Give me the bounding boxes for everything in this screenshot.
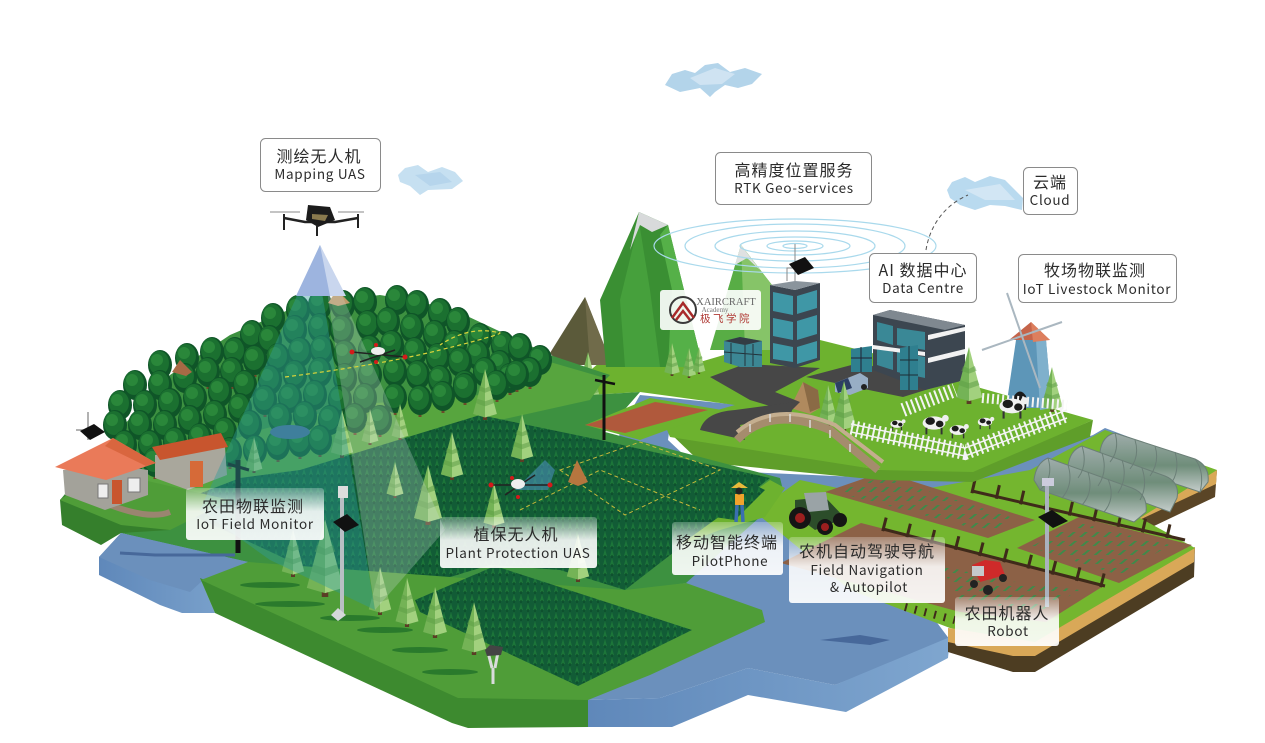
soil sensor — [485, 645, 503, 684]
power pole: back — [595, 375, 615, 440]
label: plant protection UAS: 植保无人机 — [473, 521, 559, 545]
label: IoT field monitor: 农田物联监测 — [202, 493, 304, 517]
right crop field — [1017, 517, 1192, 583]
pickup truck — [835, 373, 868, 396]
RTK signal rings — [654, 219, 936, 273]
data centre building — [873, 310, 965, 390]
label: mapping UAS: Mapping UAS — [274, 163, 366, 183]
label: IoT livestock monitor — [1018, 254, 1176, 302]
solar panel — [789, 257, 814, 275]
farmhouse with weather station — [55, 412, 156, 510]
shed — [152, 433, 228, 490]
field robot — [970, 560, 1007, 595]
windmill blades — [982, 293, 1062, 388]
label: field navigation: & Autopilot — [830, 576, 908, 596]
water front side wall — [588, 637, 950, 727]
label: IoT livestock monitor: 牧场物联监测 — [1044, 257, 1146, 281]
big front platform — [200, 562, 765, 728]
hill trees — [103, 285, 552, 482]
spray drone in field — [488, 460, 555, 499]
label: plant protection UAS — [440, 517, 597, 568]
greenhouses — [1034, 433, 1208, 522]
farm platform with fields and greenhouses — [755, 430, 1217, 672]
small data block — [851, 346, 872, 372]
small building — [724, 337, 762, 367]
pilot person — [731, 482, 748, 522]
tree shadows — [240, 582, 478, 675]
label: data centre: Data Centre — [882, 277, 964, 297]
cloud: right — [947, 176, 1023, 210]
roads — [700, 363, 948, 440]
label: field navigation: Field Navigation — [810, 559, 924, 579]
label: cloud: Cloud — [1030, 189, 1070, 209]
river and back water — [588, 395, 1150, 700]
solar sensor lamp: right — [1038, 478, 1068, 607]
upper crop field — [825, 472, 1035, 538]
label: RTK geo-services: 高精度位置服务 — [734, 157, 854, 181]
crop field: front — [415, 566, 692, 686]
power pole: left — [228, 460, 249, 553]
logo: XAIRCRAFT Academy: XAIRCRAFT — [696, 297, 756, 308]
plot with brown field — [585, 398, 722, 440]
label: mapping UAS — [260, 138, 380, 192]
land: hill base and field ground — [60, 295, 783, 592]
mountain: brown — [550, 297, 612, 365]
cloud: top — [665, 63, 762, 97]
bridge — [737, 414, 883, 470]
conifers near buildings — [550, 343, 1062, 432]
label: IoT field monitor — [186, 488, 324, 540]
label: cloud: 云端 — [1033, 169, 1067, 193]
label: field navigation — [789, 537, 945, 603]
mapping drone — [270, 205, 364, 236]
cloud: left — [398, 165, 463, 195]
label: plant protection UAS: Plant Protection UAS — [446, 542, 590, 562]
label: pilot phone: 移动智能终端 — [676, 529, 778, 553]
hill rocks — [172, 290, 350, 376]
livestock fence front — [851, 410, 1067, 456]
spray drone on hill — [350, 343, 408, 364]
field rock — [568, 460, 588, 486]
logo: XAIRCRAFT Academy: 极飞学院 — [700, 311, 752, 326]
lower crop field — [781, 523, 1105, 622]
label: robot: 农田机器人 — [964, 600, 1050, 624]
yellow dashed plots in field — [520, 442, 720, 515]
water shadow of lamp — [820, 635, 890, 645]
house island — [60, 470, 230, 545]
mountain: small green — [710, 245, 774, 350]
label: pilot phone: PilotPhone — [692, 550, 768, 570]
conifers in field — [246, 369, 589, 582]
label: data centre — [870, 254, 976, 302]
logo: XAIRCRAFT Academy: Academy — [702, 306, 729, 314]
logo: XAIRCRAFT Academy — [660, 290, 761, 330]
pond — [270, 425, 310, 439]
label: RTK geo-services: RTK Geo-services — [734, 177, 854, 197]
label: robot: Robot — [987, 620, 1029, 640]
yellow flight path — [285, 331, 500, 377]
solar sensor lamp: left — [331, 486, 359, 621]
mapping beam — [200, 245, 445, 610]
label: IoT livestock monitor: IoT Livestock Monitor — [1023, 278, 1171, 298]
tractor — [789, 492, 847, 535]
wooden fences — [883, 486, 1185, 620]
label: cloud — [1024, 168, 1078, 214]
data-centre plateau — [585, 340, 1093, 482]
tower with RTK base station — [770, 244, 820, 368]
mountain: large green — [600, 212, 703, 367]
front conifers — [282, 519, 486, 655]
left water — [99, 533, 248, 613]
livestock fence back — [903, 390, 1067, 410]
pilot land — [680, 480, 785, 545]
windmill — [982, 293, 1062, 410]
brown rock — [790, 382, 820, 414]
label: mapping UAS: 测绘无人机 — [276, 143, 362, 167]
label: pilot phone — [672, 522, 783, 575]
label: data centre: AI 数据中心 — [878, 257, 968, 281]
cows — [890, 397, 1028, 438]
label: field navigation: 农机自动驾驶导航 — [799, 538, 935, 562]
dashed link from data centre to cloud — [926, 195, 968, 250]
label: robot — [955, 597, 1059, 646]
label: RTK geo-services — [716, 152, 872, 204]
label: IoT field monitor: IoT Field Monitor — [196, 513, 314, 533]
crop field: middle — [170, 415, 770, 600]
